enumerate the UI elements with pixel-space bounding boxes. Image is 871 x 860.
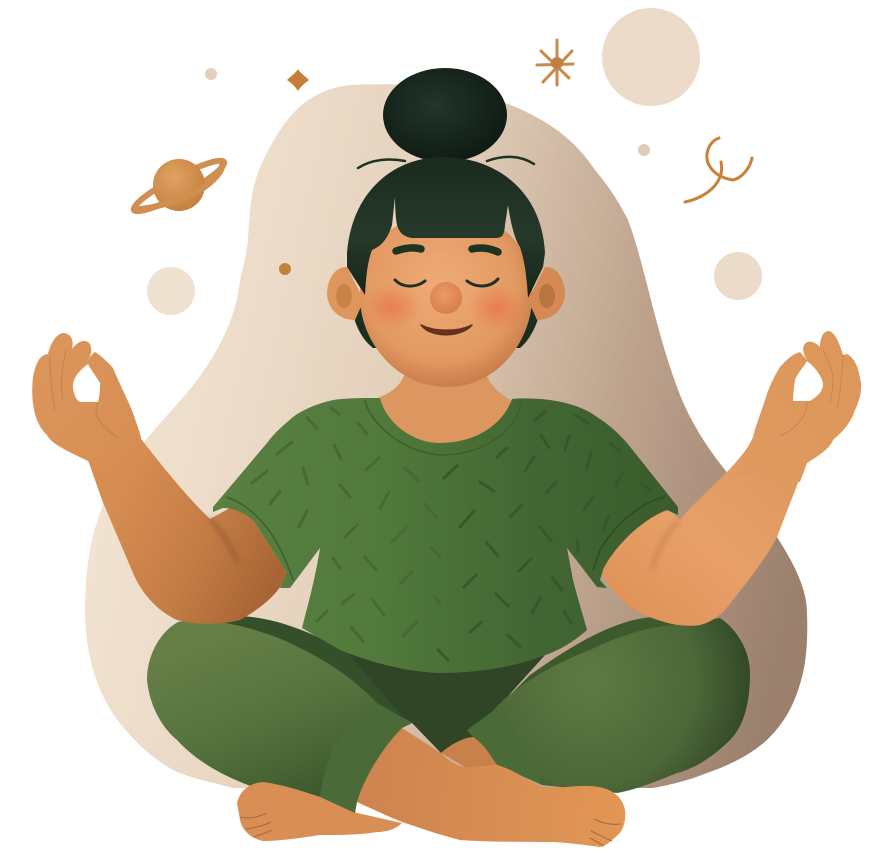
hair: back xyxy=(350,295,543,348)
hair strands xyxy=(358,157,534,168)
shirt: dash pattern xyxy=(252,408,440,641)
nose xyxy=(430,282,462,314)
shirt: right sleeve hem line xyxy=(593,497,665,570)
pants: left thigh band xyxy=(200,616,410,725)
bun xyxy=(383,68,507,162)
hair: top and fringe xyxy=(347,157,545,298)
background blob xyxy=(85,84,807,788)
arm crease: right xyxy=(652,520,680,570)
mouth xyxy=(421,325,472,335)
arm: right xyxy=(602,438,807,626)
leg: ankle xyxy=(441,737,497,770)
cheek: right xyxy=(469,284,525,332)
icon: swirl xyxy=(685,138,752,202)
leg: crossed shin and foot xyxy=(357,728,625,847)
decorative dot: orange xyxy=(279,263,291,275)
cheek: left xyxy=(364,284,420,330)
pants: center xyxy=(335,648,545,753)
pants: right cuff xyxy=(467,711,542,785)
arm: left xyxy=(88,440,287,624)
pants: right thigh band xyxy=(485,617,700,720)
decorative circle: left xyxy=(147,267,195,315)
icon: burst star xyxy=(537,40,573,85)
ear: right xyxy=(528,267,565,320)
icon: ringed planet xyxy=(130,154,228,218)
shirt: left sleeve hem line xyxy=(226,497,293,580)
hand: right xyxy=(735,331,861,482)
pants: right leg xyxy=(493,618,750,793)
neck xyxy=(378,372,514,444)
face xyxy=(360,215,532,387)
decorative dot: top right xyxy=(638,144,650,156)
decorative circle: right xyxy=(714,252,762,300)
foot: left xyxy=(237,782,402,841)
icon: small star xyxy=(287,69,309,91)
arm crease: left xyxy=(210,519,238,563)
eyebrows xyxy=(396,248,498,252)
pants: left cuff xyxy=(320,703,412,813)
pants: left leg xyxy=(147,620,377,797)
decorative circle: top right xyxy=(602,8,700,106)
eyes closed xyxy=(395,279,498,286)
decorative dot: top left xyxy=(205,68,217,80)
shirt: torso and sleeves xyxy=(213,398,678,673)
shirt: collar line xyxy=(365,400,522,455)
hand: left xyxy=(32,333,142,480)
ear: left xyxy=(327,267,364,320)
